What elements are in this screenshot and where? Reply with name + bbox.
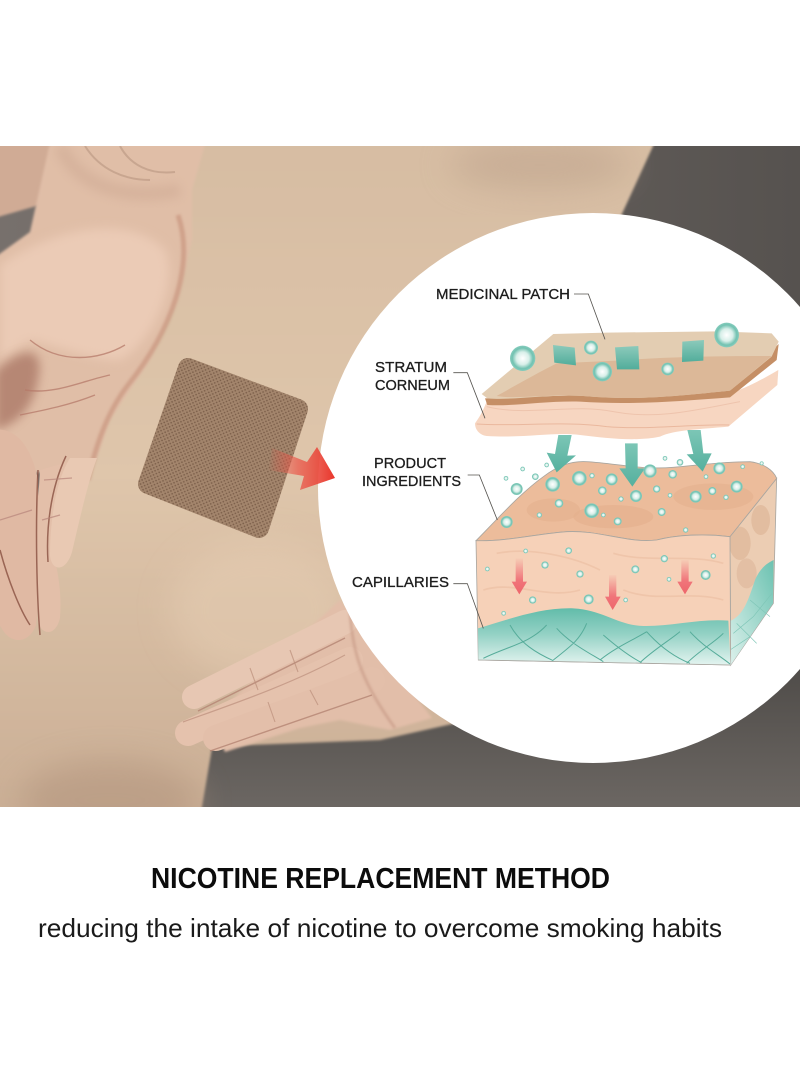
label: stratum corneum: CORNEUM (375, 377, 450, 394)
lower block right face (728, 478, 777, 665)
patch squares (553, 340, 704, 369)
lower hand (183, 600, 432, 752)
photo: arm with patch (0, 120, 800, 840)
label: capillaries: CAPILLARIES (352, 574, 449, 591)
ingredient bubbles (485, 456, 764, 616)
arrow: patch to diagram (268, 447, 335, 490)
arm (0, 120, 665, 840)
circular inset (318, 213, 800, 763)
label: product ingredients: INGREDIENTS (362, 473, 461, 490)
capillaries layer (478, 608, 731, 665)
label: product ingredients (362, 455, 461, 490)
red arrows (512, 558, 693, 610)
teal arrows (547, 430, 712, 487)
patch bubbles (510, 323, 739, 381)
label: product ingredients: PRODUCT (374, 455, 446, 472)
photo background (0, 146, 800, 810)
label: stratum corneum (375, 359, 450, 394)
label: medicinal patch: MEDICINAL PATCH (436, 286, 570, 303)
patch (148, 368, 298, 528)
medicinal patch layers (475, 331, 779, 439)
diagram: skin layers (453, 294, 779, 665)
upper left skin (0, 146, 51, 218)
lower block top face (476, 462, 777, 541)
left hand (0, 120, 212, 640)
leader lines (453, 294, 605, 628)
left fingers (0, 429, 97, 640)
label: stratum corneum: STRATUM (375, 359, 447, 376)
title: NICOTINE REPLACEMENT METHOD (151, 863, 610, 895)
lower block front face (476, 532, 731, 665)
subtitle: reducing the intake of nicotine to overcome smoking habits (38, 913, 722, 943)
infographic (0, 146, 800, 942)
